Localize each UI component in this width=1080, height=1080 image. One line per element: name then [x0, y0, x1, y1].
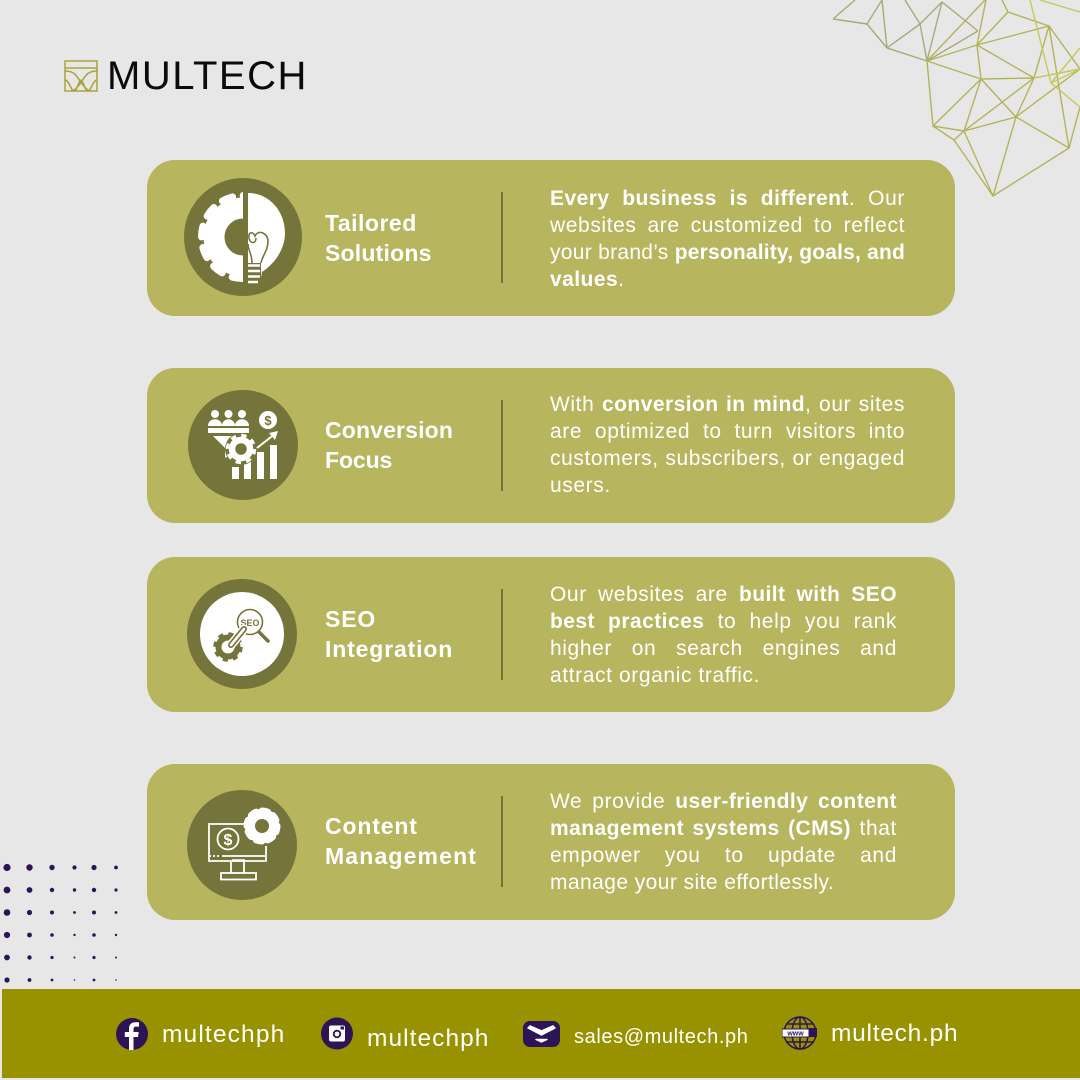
heading: Solutions	[325, 240, 432, 266]
text block: Every business is different. Our	[550, 187, 905, 210]
text block	[550, 187, 905, 291]
panel: seo integration	[147, 557, 955, 712]
icon: instagram	[321, 1018, 353, 1050]
text block: your brand’s personality, goals, and	[550, 241, 905, 264]
text block: higher on search engines and	[550, 637, 897, 660]
icon: facebook	[116, 1018, 148, 1050]
text block: are optimized to turn visitors into	[550, 420, 905, 443]
icon: gear and light bulb	[184, 178, 302, 296]
logo	[64, 54, 308, 98]
panel: conversion focus	[147, 368, 955, 523]
heading: Management	[325, 843, 477, 869]
heading	[325, 417, 453, 473]
text block: With conversion in mind, our sites	[550, 393, 905, 416]
heading	[325, 813, 477, 869]
text block: manage your site effortlessly.	[550, 871, 834, 894]
panel: tailored solutions	[147, 160, 955, 316]
icon: seo magnifier and gear: SEO	[240, 618, 260, 628]
heading: Content	[325, 813, 418, 839]
icon: email	[523, 1021, 560, 1047]
logo wordmark: MULTECH	[107, 54, 308, 98]
heading: Integration	[325, 636, 453, 662]
heading	[325, 606, 453, 662]
footer bar	[2, 989, 1080, 1078]
icon: funnel and growth chart	[188, 390, 298, 500]
heading: Tailored	[325, 210, 417, 236]
text block: best practices to help you rank	[550, 610, 897, 633]
panel: content management	[147, 764, 955, 920]
icon: monitor and gear	[187, 790, 297, 900]
divider	[501, 192, 503, 283]
heading: SEO	[325, 606, 376, 632]
heading	[325, 210, 432, 266]
text block: values.	[550, 268, 625, 291]
footer label: email: sales@multech.ph	[574, 1026, 748, 1048]
text block: customers, subscribers, or engaged	[550, 447, 905, 470]
text block	[550, 583, 897, 687]
logo mark	[64, 60, 98, 92]
text block: Our websites are built with SEO	[550, 583, 897, 606]
decorative geometric network	[832, 0, 1080, 197]
heading: Conversion	[325, 417, 453, 443]
heading: Focus	[325, 447, 392, 473]
text block: attract organic traffic.	[550, 664, 760, 687]
footer label: website: multech.ph	[831, 1020, 958, 1047]
text block: websites are customized to reflect	[550, 214, 905, 237]
footer label: instagram: multechph	[367, 1025, 490, 1052]
footer label: facebook: multechph	[162, 1021, 285, 1048]
icon: funnel and growth chart: $	[264, 413, 272, 428]
text block: empower you to update and	[550, 844, 897, 867]
icon: monitor and gear: $	[224, 832, 233, 849]
text block	[550, 790, 897, 894]
text block	[550, 393, 905, 497]
text block: management systems (CMS) that	[550, 817, 897, 840]
icon: globe www	[782, 1016, 817, 1050]
text block: We provide user-friendly content	[550, 790, 897, 813]
text block: users.	[550, 474, 611, 497]
divider	[501, 796, 503, 887]
decorative dot grid	[3, 864, 118, 983]
divider	[501, 589, 503, 680]
divider	[501, 400, 503, 491]
icon: globe www: www	[786, 1030, 804, 1038]
icon: seo magnifier and gear	[187, 579, 297, 689]
